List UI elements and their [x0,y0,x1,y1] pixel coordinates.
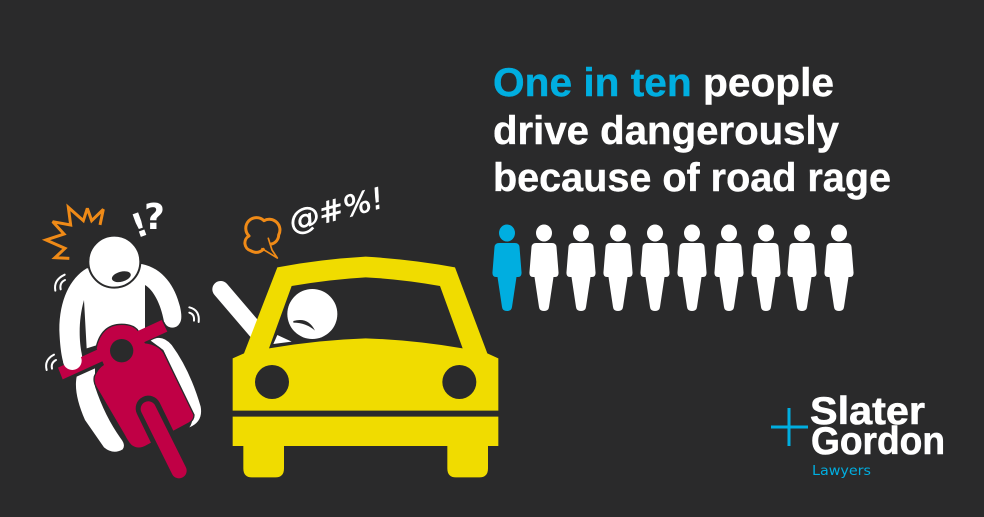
rider on scooter [46,207,201,471]
logo wordmark [810,390,945,463]
logo: Slater Gordon Lawyers [771,390,945,479]
pictogram: one in ten people [492,224,854,311]
motion lines [46,275,199,370]
driver arm [221,289,258,333]
rider legs [76,338,201,452]
windscreen [269,277,463,348]
bumper and wheels [233,417,498,477]
car with angry driver [221,218,498,477]
driver angry brow [293,320,315,331]
car body [233,257,498,411]
headline: drive dangerously [493,109,840,153]
swearing symbols: @#%! [285,181,388,239]
exclamation and question marks: ! [126,204,153,246]
scooter body [95,325,193,447]
headline: One in ten people [493,61,834,105]
icon: orange impact burst [46,207,103,258]
logo sub-label: Lawyers [812,463,871,479]
scooter wheel [148,408,178,470]
rider hands on handlebar [63,311,181,370]
exclamation and question marks: ? [144,197,165,238]
rider open mouth [111,269,132,284]
scooter handlebar [58,320,167,379]
driver shoulder [273,335,292,344]
headline [493,61,891,200]
headlights [255,365,476,399]
exclamation and question marks [126,197,165,246]
scooter headlight [110,339,133,362]
rider torso and arms [59,264,181,370]
logo plus mark [771,408,808,446]
logo wordmark: Slater [810,390,925,433]
logo wordmark: Gordon [811,420,945,463]
driver head [287,289,337,339]
rider head [88,236,140,288]
icon: orange steam cloud [245,218,280,258]
headline: because of road rage [493,156,891,200]
